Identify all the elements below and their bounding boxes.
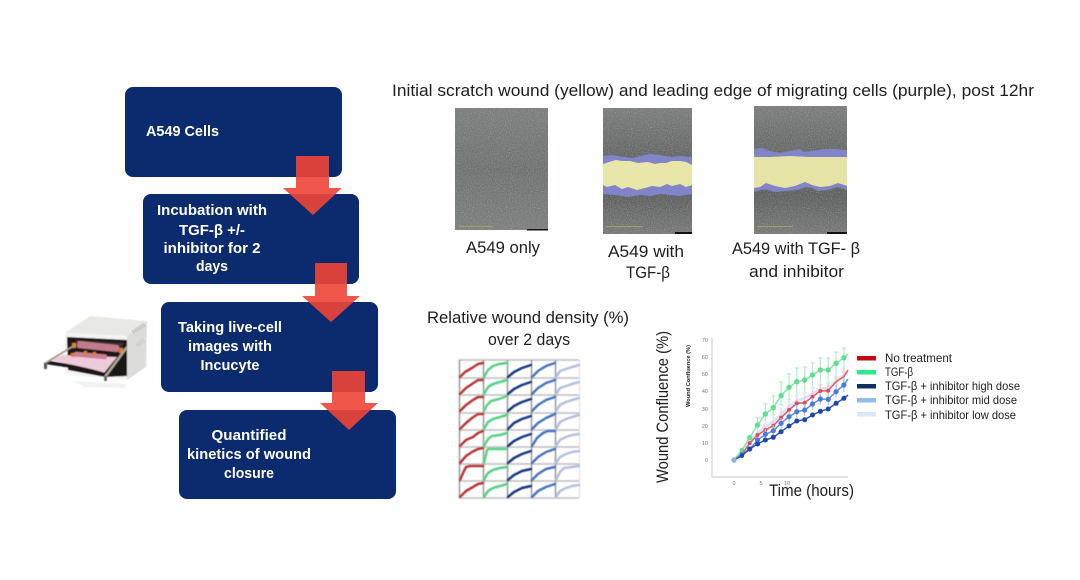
flowchart step: quantified kinetics: Quantified — [212, 427, 286, 444]
flowchart step: incubation: Incubation with — [157, 202, 267, 219]
curves column: low dose (pale blue) — [556, 365, 579, 497]
micrograph: A549 only — [455, 108, 548, 230]
axis label: wound confluence: Wound Confluence (%) — [654, 331, 672, 483]
legend: high dose: TGF-β + inhibitor high dose — [885, 379, 1020, 393]
flowchart step: A549 Cells: A549 Cells — [146, 123, 219, 140]
series: no treatment — [734, 368, 848, 460]
curves column: high dose (dark blue) — [508, 365, 531, 497]
legend: no treatment — [857, 351, 953, 365]
chart y ticks: 60 — [702, 355, 708, 361]
flowchart step: incubation — [143, 194, 359, 284]
axis label: time: Time (hours) — [769, 482, 854, 500]
arrow: step 1 to step 2 — [283, 156, 342, 215]
chart origin point — [731, 457, 737, 463]
chart y ticks: 0 — [705, 458, 708, 464]
legend: TGF-beta: TGF-β — [885, 365, 913, 379]
caption: A549 with TGF-beta: TGF-β — [626, 264, 670, 282]
series: high dose — [734, 395, 848, 460]
legend: low dose: TGF-β + inhibitor low dose — [885, 408, 1016, 422]
caption: A549 with TGF-beta: A549 with — [608, 243, 684, 261]
flowchart step: incubation: days — [196, 258, 228, 275]
curves column: mid dose (medium blue) — [532, 363, 555, 497]
caption: A549 with TGF-beta and inhibitor: A549 with TGF- β — [732, 240, 860, 258]
chart x ticks — [732, 481, 790, 487]
flowchart step: live-cell imaging: Taking live-cell — [178, 319, 282, 336]
chart x ticks: 0 — [732, 481, 736, 487]
flowchart step: quantified kinetics: closure — [224, 465, 274, 482]
small-multiples grid of wound density curves — [459, 360, 580, 498]
chart small y-axis title: Wound Confluence (%) — [686, 345, 692, 407]
chart y ticks: 20 — [702, 424, 708, 430]
micrograph: A549 with TGF-beta — [603, 108, 692, 234]
chart x ticks: 10 — [784, 481, 790, 487]
line chart: wound confluence over time — [686, 338, 848, 487]
legend: no treatment: No treatment — [885, 351, 953, 365]
flowchart step: incubation: TGF-β +/- — [179, 222, 245, 239]
flowchart step: incubation: inhibitor for 2 — [164, 240, 260, 257]
flowchart step: quantified kinetics — [179, 410, 396, 499]
caption: A549 with TGF-beta — [608, 243, 684, 282]
curves column: TGF-beta (green) — [484, 363, 507, 497]
legend — [857, 351, 1020, 422]
chart axes — [712, 338, 848, 477]
chart y ticks: 40 — [702, 389, 708, 395]
heading: scratch wound images: Initial scratch wound (yellow) and leading edge of migrating cells (purple), post 12hr — [392, 82, 1035, 100]
icon: Incucyte live-cell imager — [44, 316, 147, 388]
flowchart step: A549 Cells — [125, 87, 342, 177]
series: mid dose — [734, 378, 848, 460]
flowchart step: live-cell imaging: images with — [188, 338, 272, 355]
flowchart step: quantified kinetics: kinetics of wound — [187, 446, 311, 463]
series: TGF-beta — [734, 354, 848, 460]
chart x ticks: 5 — [759, 481, 763, 487]
chart y ticks — [702, 338, 708, 464]
flowchart step: live-cell imaging: Incucyte — [200, 357, 260, 374]
flowchart step: live-cell imaging — [161, 302, 378, 392]
chart y ticks: 10 — [702, 441, 708, 447]
arrow: step 2 to step 3 — [302, 263, 360, 322]
arrow: step 3 to step 4 — [320, 371, 378, 430]
heading: relative wound density — [427, 309, 629, 349]
series: TGF-beta error bars — [756, 348, 846, 433]
chart y ticks: 50 — [702, 372, 708, 378]
legend: TGF-beta — [857, 365, 913, 379]
legend: mid dose: TGF-β + inhibitor mid dose — [885, 393, 1017, 407]
curves column: no treatment (red) — [460, 363, 483, 497]
caption: A549 only: A549 only — [466, 239, 541, 257]
heading: relative wound density: Relative wound density (%) — [427, 309, 629, 327]
heading: relative wound density: over 2 days — [488, 331, 570, 349]
series: low dose — [734, 367, 848, 460]
chart y ticks: 30 — [702, 407, 708, 413]
chart y ticks: 70 — [702, 338, 708, 344]
caption: A549 with TGF-beta and inhibitor — [732, 240, 860, 281]
caption: A549 with TGF-beta and inhibitor: and inhibitor — [749, 263, 845, 281]
micrograph: A549 with TGF-beta and inhibitor — [754, 106, 847, 234]
